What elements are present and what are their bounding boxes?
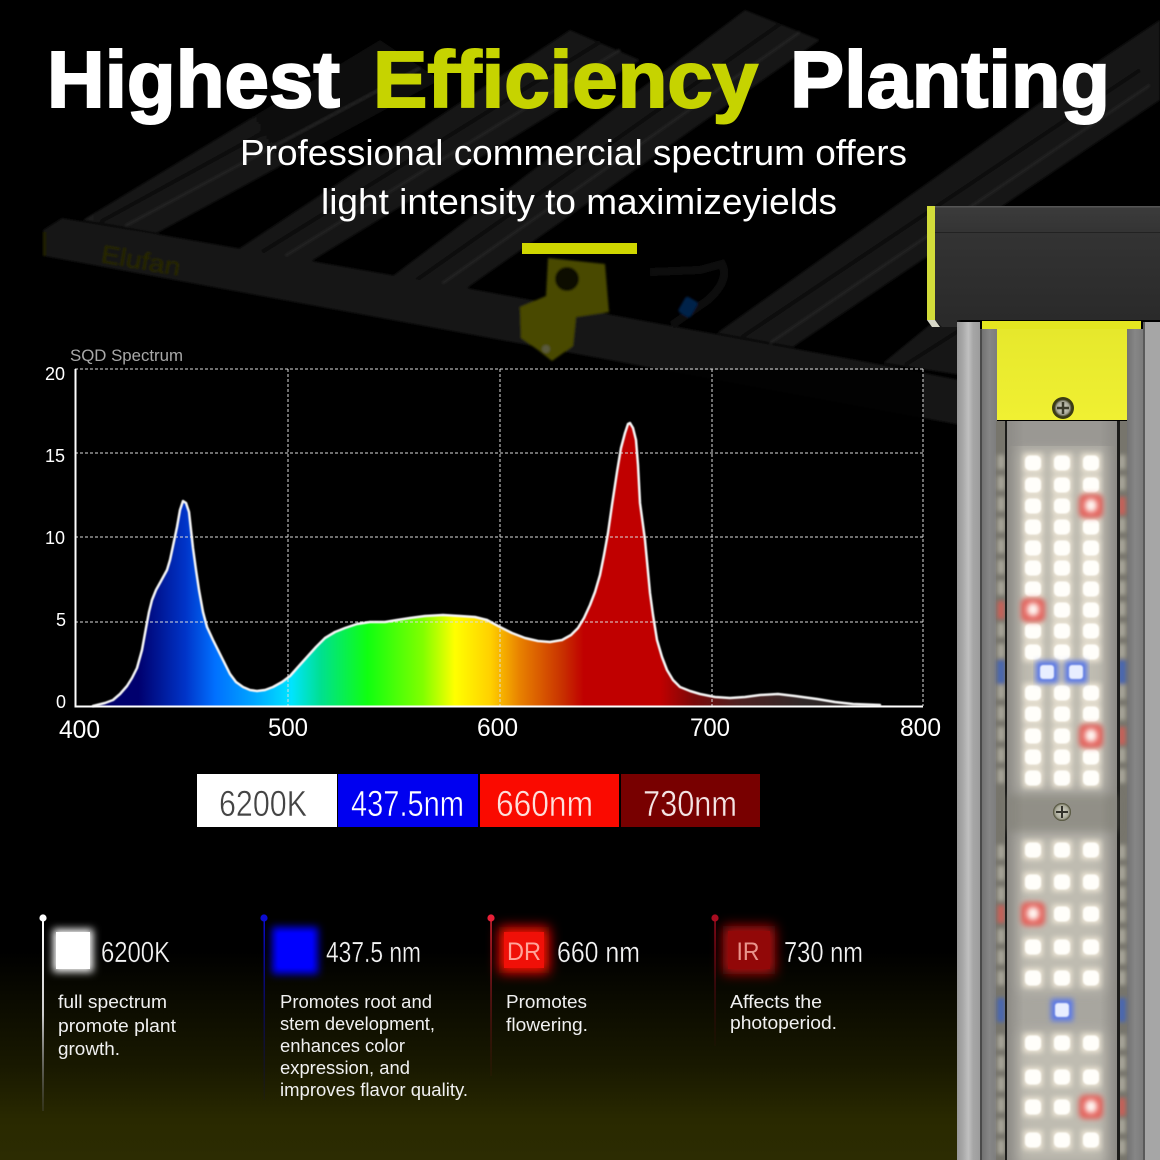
label: 437.5 nm: [326, 937, 421, 969]
title: Highest: [47, 35, 340, 124]
legend bar: [197, 774, 760, 827]
description: improves flavor quality.: [280, 1079, 468, 1100]
icon: IR badge: [723, 926, 775, 974]
chart title: SQD Spectrum: [70, 347, 183, 365]
yellow mounting bracket: [982, 321, 1141, 420]
side reflector strips: [996, 421, 1127, 1160]
white LED cores: [1025, 456, 1099, 1148]
description: stem development,: [280, 1013, 435, 1034]
chart: SQD spectrum: [45, 347, 941, 744]
x axis labels: 600: [477, 714, 518, 742]
description: enhances color: [280, 1035, 405, 1056]
label: 660 nm: [557, 937, 640, 969]
brand text on frame: Elufan: [99, 240, 183, 282]
icon: DR badge: [499, 927, 549, 973]
legend swatch: 730nm: 730nm: [643, 783, 737, 824]
y axis labels: 5: [56, 610, 66, 630]
chart axes: [76, 369, 923, 706]
title: Planting: [790, 35, 1110, 124]
power cable and blue connector: [650, 264, 724, 325]
info column: 730 nm: [711, 914, 863, 1046]
description: photoperiod.: [730, 1012, 837, 1033]
x axis labels: 500: [268, 714, 308, 742]
legend swatch: 6200K: [197, 774, 337, 827]
description: flowering.: [506, 1014, 588, 1035]
driver housing: [927, 206, 1160, 327]
LED panel: [1007, 421, 1117, 1160]
title: Efficiency: [373, 35, 759, 124]
white LED glow: [1024, 454, 1100, 1150]
icon: DR badge: DR: [507, 938, 541, 966]
description: growth.: [58, 1038, 120, 1059]
y axis labels: 20: [45, 364, 65, 384]
y axis labels: 0: [56, 692, 66, 712]
x axis labels: [59, 714, 941, 744]
icon: white square: [53, 929, 93, 972]
legend swatch: 660nm: [480, 774, 619, 827]
frame front bar: [43, 218, 960, 425]
info column: 437.5 nm: [260, 914, 468, 1100]
description: [506, 991, 588, 1035]
yellow bracket: [520, 258, 609, 361]
description: [58, 991, 176, 1059]
subtitle: [240, 132, 907, 222]
legend swatch: 730nm: [621, 774, 760, 827]
chart backdrop: [75, 370, 923, 706]
red LEDs: [1021, 494, 1103, 1119]
title accent bar: [522, 243, 637, 254]
subtitle: light intensity to maximizeyields: [321, 181, 837, 222]
pin line: [264, 918, 265, 1100]
pin line: [42, 918, 44, 1111]
legend swatch: 437.5nm: 437.5nm: [351, 783, 464, 824]
icon: blue square: [272, 927, 318, 974]
frame yellow end cap: [43, 232, 46, 256]
description: full spectrum: [58, 991, 167, 1012]
horizontal and vertical grid: [75, 369, 923, 706]
x axis labels: 400: [59, 716, 100, 744]
info column: 660 nm: [487, 914, 640, 1076]
subtitle: Professional commercial spectrum offers: [240, 132, 907, 173]
x axis labels: 800: [900, 714, 941, 742]
frame cross bars: [83, 10, 1160, 375]
spectrum area fill: [93, 423, 923, 706]
title: [47, 35, 1110, 124]
y axis labels: 15: [45, 446, 65, 466]
LED light bar product image: [927, 206, 1160, 1160]
legend swatch: 660nm: 660nm: [496, 783, 593, 824]
legend swatch: 6200K: 6200K: [219, 783, 307, 824]
y axis labels: [45, 364, 66, 712]
description: expression, and: [280, 1057, 410, 1078]
description: Promotes: [506, 991, 587, 1012]
left and right aluminium rails: [957, 322, 1160, 1160]
description: Promotes root and: [280, 991, 432, 1012]
blue LEDs: [1036, 661, 1087, 1021]
legend swatch: 437.5nm: [338, 774, 478, 827]
label: 6200K: [101, 937, 171, 969]
description: promote plant: [58, 1015, 176, 1036]
ghosted lamp frame in background: [43, 10, 1160, 425]
y axis labels: 10: [45, 528, 65, 548]
x axis labels: 700: [690, 714, 730, 742]
pin line: [490, 918, 492, 1076]
info column: 6200K: [39, 914, 176, 1111]
pin line: [714, 918, 716, 1046]
description: Affects the: [730, 991, 822, 1012]
icon: IR badge: IR: [736, 938, 760, 966]
label: 730 nm: [784, 937, 863, 969]
spectrum outline: [93, 423, 880, 706]
description: [730, 991, 837, 1033]
description: [280, 991, 468, 1100]
panel screw: [1053, 803, 1071, 821]
